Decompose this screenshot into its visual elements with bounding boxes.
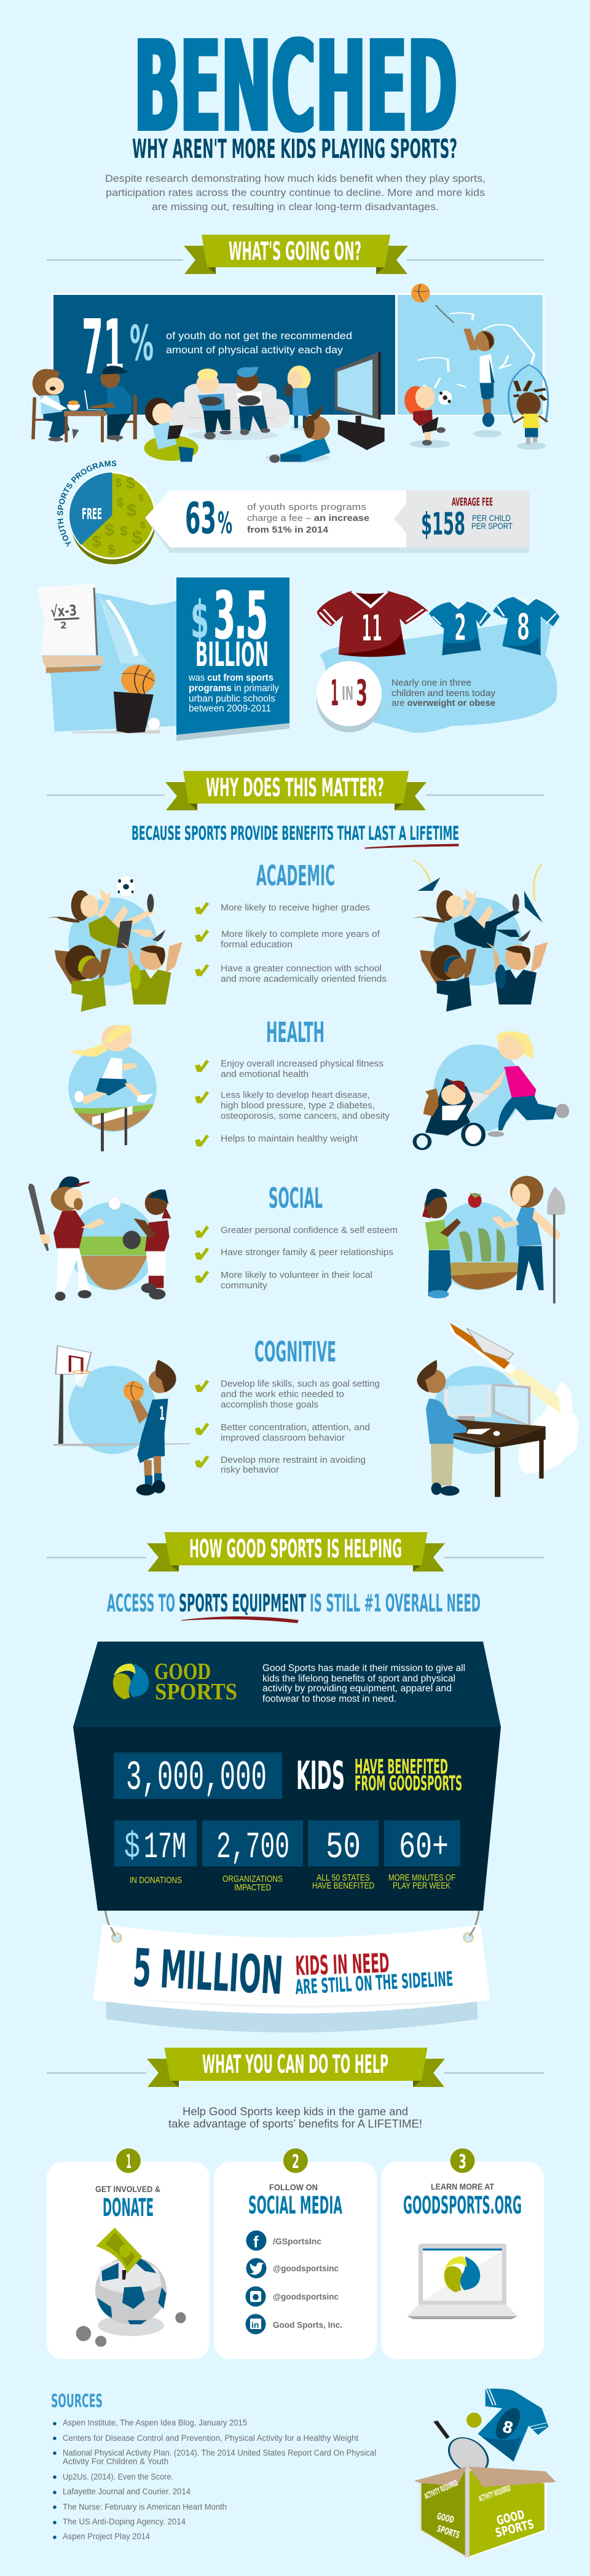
hanging banner: 5 million kids in need: 5 MILLION xyxy=(132,1938,285,2007)
intro text: are missing out, resulting in clear long-term disadvantages. xyxy=(152,202,439,213)
heading: benefits that last a lifetime xyxy=(132,823,459,848)
counter: 3,000,000 kids: HAVE BENEFITED xyxy=(355,1755,448,1779)
stat counters: 50 xyxy=(326,1827,361,1869)
stat labels: IMPACTED xyxy=(234,1883,271,1893)
stat counters: 60+ xyxy=(399,1827,449,1869)
illustration: baseball players xyxy=(28,1176,171,1301)
benefits list: cognitive: Better concentration, attention, and xyxy=(221,1423,370,1433)
section banner: what you can do to help: WHAT YOU CAN DO TO HELP xyxy=(202,2049,388,2079)
panel: good sports stats xyxy=(73,1642,501,1911)
section banner: how good sports is helping xyxy=(47,1532,544,1572)
illustration: graduates celebrating xyxy=(411,860,548,1012)
pie chart: youth sports programs: $ xyxy=(126,474,135,492)
help text xyxy=(168,2105,422,2130)
callout: 1 in 3: children and teens today xyxy=(391,688,496,699)
sources: Activity For Children & Youth xyxy=(63,2457,168,2466)
help text: take advantage of sports’ benefits for A LIFETIME! xyxy=(168,2118,422,2130)
benefits list: cognitive: improved classroom behavior xyxy=(221,1433,345,1443)
illustration: good sports equipment box: SPORTS xyxy=(494,2516,535,2540)
card: social media xyxy=(214,2148,377,2359)
stat labels: IN DONATIONS xyxy=(130,1876,182,1885)
panel: inactive vs active youth: of youth do not get the recommended xyxy=(166,330,352,342)
math formula on paper xyxy=(50,601,79,631)
social handles: @goodsportsinc xyxy=(273,2263,339,2273)
stat: 3.5 billion cut: urban public schools xyxy=(189,694,275,704)
mission text: footwear to those most in need. xyxy=(262,1694,396,1704)
math formula on paper: 2 xyxy=(60,620,66,631)
social handles xyxy=(273,2236,342,2330)
icon: linkedin xyxy=(246,2314,266,2335)
pie chart: youth sports programs: $ xyxy=(120,523,127,539)
pie chart: youth sports programs: $ xyxy=(116,477,122,489)
social handles: Good Sports, Inc. xyxy=(273,2320,342,2330)
pie chart: youth sports programs xyxy=(57,461,155,565)
benefits list: health: Enjoy overall increased physical fitness xyxy=(221,1059,384,1069)
sources: Aspen Institute, The Aspen Idea Blog, January 2015 xyxy=(63,2418,247,2427)
logo: good sports: SPORTS xyxy=(155,1679,237,1705)
callout: 63 percent charge a fee: AVERAGE FEE xyxy=(452,496,493,509)
illustration: kids outdoors xyxy=(404,284,548,450)
callout: 1 in 3: are overweight or obese xyxy=(391,698,495,708)
card: donate: GET INVOLVED & xyxy=(95,2184,160,2194)
icon: facebook: f xyxy=(253,2233,259,2251)
illustration: rocket scientist xyxy=(417,1323,578,1497)
text: SOCIAL xyxy=(269,1182,323,1215)
text: 1 xyxy=(159,1403,165,1425)
illustration: jerseys: 11 xyxy=(361,607,382,650)
logo: good sports: GOOD xyxy=(154,1659,211,1685)
pie chart: youth sports programs: FREE xyxy=(82,505,102,523)
callout: 1 in 3: Nearly one in three xyxy=(391,678,471,688)
callout: 1 in 3: IN xyxy=(342,683,353,705)
sources xyxy=(51,2390,376,2541)
illustration: good sports equipment box xyxy=(414,2389,556,2558)
card: learn more: LEARN MORE AT xyxy=(431,2182,494,2191)
benefits list: academic: formal education xyxy=(221,940,293,950)
sources: National Physical Activity Plan. (2014). The 2014 United States Report Card On Physical xyxy=(63,2448,376,2457)
pie chart: youth sports programs: $ xyxy=(108,542,115,557)
pie chart: youth sports programs: $ xyxy=(138,493,144,503)
illustration: parent with stroller xyxy=(415,1031,569,1149)
callout: 63 percent charge a fee: % xyxy=(218,506,232,541)
pie chart: youth sports programs: $ xyxy=(104,520,114,539)
callout: 1 in 3: 3 xyxy=(356,672,368,714)
benefits list: academic: More likely to receive higher grades xyxy=(221,903,370,913)
hanging banner: 5 million kids in need xyxy=(93,1911,490,2032)
callout: 1 in 3 xyxy=(317,661,496,732)
section banner: what's going on: WHAT'S GOING ON? xyxy=(229,237,361,266)
section banner: what's going on xyxy=(47,235,544,274)
icon: facebook xyxy=(246,2230,267,2251)
benefits list: health: and emotional health xyxy=(221,1070,309,1079)
panel: inactive vs active youth: % xyxy=(130,316,154,372)
text: HEALTH xyxy=(266,1016,324,1049)
section banner: why does this matter xyxy=(47,771,544,810)
stat counters: 17M xyxy=(144,1827,186,1869)
icon: coins xyxy=(76,2326,106,2347)
help text: Help Good Sports keep kids in the game and xyxy=(183,2105,408,2118)
illustration: kids indoors xyxy=(33,351,385,463)
math formula on paper: √x-3 xyxy=(50,601,77,621)
counter: 3,000,000 kids: 3,000,000 xyxy=(126,1755,267,1802)
stat: 3.5 billion cut: was cut from sports xyxy=(188,673,273,683)
callout: 63 percent charge a fee xyxy=(145,490,530,553)
pie chart: youth sports programs: $ xyxy=(127,501,136,520)
callout: 63 percent charge a fee: charge a fee – an increase xyxy=(247,513,369,523)
benefits list: academic: and more academically oriented friends xyxy=(221,974,387,984)
callout: 63 percent charge a fee: from 51% in 2014 xyxy=(247,525,329,535)
icon: instagram xyxy=(246,2287,266,2306)
stat counters: $ xyxy=(124,1827,140,1869)
stat: 3.5 billion cut: BILLION xyxy=(195,635,269,674)
pie chart: youth sports programs: $ xyxy=(117,496,124,510)
benefits list: social: community xyxy=(221,1281,268,1291)
intro text xyxy=(105,173,486,213)
benefits list: social: Greater personal confidence & self esteem xyxy=(221,1226,398,1235)
heading: access to sports equipment xyxy=(107,1590,481,1623)
illustration: soccer kids celebrating xyxy=(45,876,183,1012)
benefits list: academic xyxy=(195,902,387,984)
card: social media: 2 xyxy=(292,2151,299,2173)
mission text: kids the lifelong benefits of sport and physical xyxy=(262,1674,455,1684)
illustration: good sports equipment box: ACTIVITY REQUIRED xyxy=(423,2478,460,2502)
illustration: gardening volunteers xyxy=(422,1176,565,1304)
illustration: good sports equipment box: GOOD xyxy=(436,2510,455,2526)
benefits list: social: More likely to volunteer in their local xyxy=(221,1270,372,1280)
callout: 63 percent charge a fee: $158 xyxy=(421,506,465,542)
benefits list: cognitive: risky behavior xyxy=(221,1465,279,1475)
icon: soccer ball bank xyxy=(95,2228,186,2336)
illustration: math over sports xyxy=(36,584,177,734)
section banner: why does this matter: WHY DOES THIS MATTER? xyxy=(206,773,384,802)
sources: Up2Us. (2014). Even the Score. xyxy=(63,2472,173,2481)
icon: laptop xyxy=(407,2244,517,2319)
mission text xyxy=(262,1663,465,1704)
panel: inactive vs active youth: 71 xyxy=(82,304,125,392)
card: social media: FOLLOW ON xyxy=(269,2182,318,2192)
card: social media: SOCIAL MEDIA xyxy=(248,2192,342,2220)
stat labels: MORE MINUTES OF xyxy=(388,1873,455,1883)
callout: 63 percent charge a fee: 63 xyxy=(185,493,216,544)
stat labels xyxy=(130,1873,455,1893)
callout: 63 percent charge a fee: PER SPORT xyxy=(471,521,513,531)
illustration: good sports equipment box: GOOD xyxy=(495,2507,526,2528)
benefits list: health: high blood pressure, type 2 diabetes, xyxy=(221,1101,375,1111)
illustration: good sports equipment box: SPORTS xyxy=(436,2523,461,2541)
stat labels: PLAY PER WEEK xyxy=(393,1881,450,1891)
benefits list: health: Helps to maintain healthy weight xyxy=(221,1134,358,1144)
sources: The US Anti-Doping Agency. 2014 xyxy=(63,2517,186,2526)
pie chart: youth sports programs: YOUTH SPORTS PROGRAMS xyxy=(57,461,117,547)
benefits list: cognitive: and the work ethic needed to xyxy=(221,1390,344,1400)
card: donate xyxy=(47,2148,210,2359)
sources: The Nurse: February is American Heart Month xyxy=(63,2502,227,2511)
heading: access to sports equipment: SPORTS EQUIPMENT xyxy=(179,1590,306,1618)
benefits list: health xyxy=(195,1059,390,1147)
illustration: jerseys: 2 xyxy=(454,606,466,649)
sources: Aspen Project Play 2014 xyxy=(63,2532,150,2541)
counter: 3,000,000 kids: KIDS xyxy=(296,1753,345,1798)
pie chart: youth sports programs: $ xyxy=(92,532,101,550)
mission text: activity by providing equipment, apparel and xyxy=(262,1683,452,1694)
pie chart: youth sports programs: $ xyxy=(140,520,146,531)
heading: access to sports equipment: ACCESS TO xyxy=(107,1590,175,1618)
stat counters: 2,700 xyxy=(216,1827,289,1869)
stat counters xyxy=(114,1820,460,1869)
benefits list: social: Have stronger family & peer relationships xyxy=(221,1248,393,1258)
illustration: good sports equipment box: 8 xyxy=(500,2417,515,2438)
benefits list: academic: More likely to complete more years of xyxy=(221,930,380,939)
stat labels: ORGANIZATIONS xyxy=(222,1874,283,1884)
icon: linkedin: in xyxy=(251,2320,259,2330)
heading: benefits that last a lifetime: BECAUSE SPORTS PROVIDE BENEFITS THAT xyxy=(132,823,365,845)
pie chart: youth sports programs: $ xyxy=(132,528,143,548)
text: COGNITIVE xyxy=(254,1336,336,1368)
card: donate: DONATE xyxy=(103,2194,154,2222)
intro text: Despite research demonstrating how much kids benefit when they play sports, xyxy=(105,173,486,184)
social handles: @goodsportsinc xyxy=(273,2292,339,2301)
benefits list: cognitive: Develop more restraint in avoiding xyxy=(221,1455,366,1465)
card: learn more: 3 xyxy=(458,2151,466,2173)
sources: SOURCES xyxy=(51,2390,103,2411)
social handles: /GSportsInc xyxy=(273,2236,321,2246)
stat: 3.5 billion cut: between 2009-2011 xyxy=(189,703,271,714)
stat labels: HAVE BENEFITED xyxy=(312,1881,374,1891)
panel: good sports stats: FROM GOODSPORTS xyxy=(355,1771,462,1795)
benefits list: cognitive: Develop life skills, such as goal setting xyxy=(221,1379,380,1389)
callout: 63 percent charge a fee: of youth sports programs xyxy=(247,502,366,512)
sources: Lafayette Journal and Courier. 2014 xyxy=(63,2487,191,2496)
card: learn more xyxy=(381,2148,544,2359)
panel: inactive vs active youth xyxy=(52,293,545,416)
illustration: jerseys: 8 xyxy=(517,606,530,649)
benefits list: health: osteoporosis, some cancers, and obesity xyxy=(221,1111,390,1121)
icon: twitter xyxy=(246,2258,267,2278)
sources: Centers for Disease Control and Prevention, Physical Activity for a Healthy Weight xyxy=(63,2433,358,2443)
stat: 3.5 billion cut: programs in primarily xyxy=(189,683,279,694)
callout: 1 in 3: 1 xyxy=(331,672,339,714)
panel: inactive vs active youth: amount of physical activity each day xyxy=(166,344,344,356)
section banner: what you can do to help xyxy=(47,2048,544,2087)
benefits list: cognitive xyxy=(195,1379,380,1475)
card: donate: 1 xyxy=(126,2151,132,2173)
benefits list: cognitive: accomplish those goals xyxy=(221,1400,318,1410)
illustration: good sports equipment box: ACTIVITY REQUIRED xyxy=(478,2484,512,2504)
benefits list: social xyxy=(195,1226,398,1291)
counter: 3,000,000 kids xyxy=(114,1752,462,1802)
heading: benefits that last a lifetime: LAST A LIFETIME xyxy=(368,823,459,845)
benefits list: academic: Have a greater connection with school xyxy=(221,964,382,974)
stat: 3.5 billion cut: 3.5 xyxy=(214,578,267,654)
illustration: jerseys xyxy=(317,591,559,733)
text: ACADEMIC xyxy=(256,859,335,892)
stat: 3.5 billion cut: $ xyxy=(191,590,209,651)
illustration: hurdler xyxy=(68,1025,157,1151)
logo: good sports xyxy=(113,1659,237,1705)
callout: 63 percent charge a fee: PER CHILD xyxy=(472,513,511,523)
illustration: basketball player xyxy=(53,1346,190,1495)
hanging banner: 5 million kids in need: KIDS IN NEED xyxy=(295,1948,390,1982)
benefits list: health: Less likely to develop heart disease, xyxy=(221,1090,370,1100)
mission text: Good Sports has made it their mission to give all xyxy=(262,1663,465,1674)
intro text: participation rates across the country continue to decline. More and more kids xyxy=(106,187,485,198)
stat labels: ALL 50 STATES xyxy=(317,1873,370,1883)
stat: 3.5 billion cut xyxy=(176,577,289,741)
